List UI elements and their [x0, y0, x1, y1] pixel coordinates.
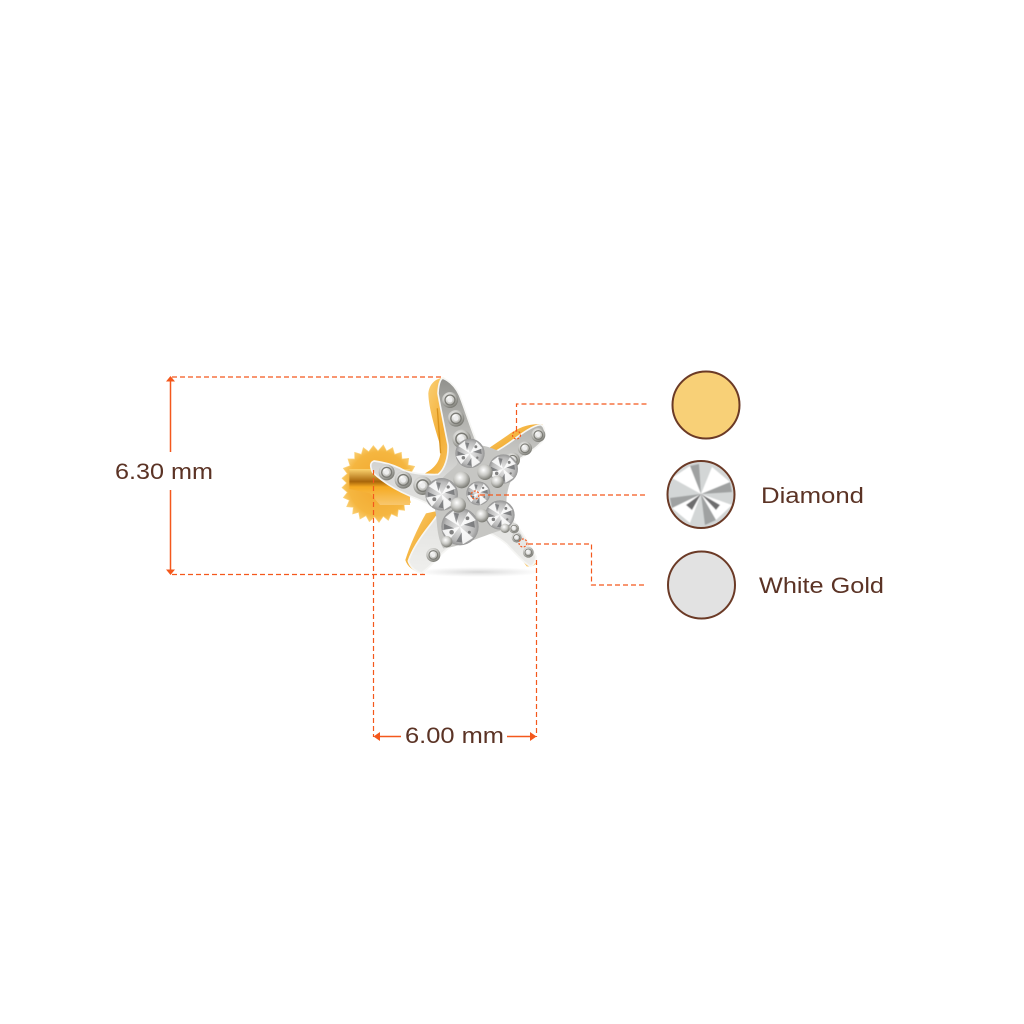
swatch: white gold	[668, 552, 735, 618]
swatch: diamond	[668, 461, 734, 528]
gold highlights	[412, 408, 441, 560]
callout: diamond leader	[471, 491, 646, 499]
gold back: lower left arm	[405, 510, 447, 574]
gold back: top arm	[425, 378, 463, 475]
polished beads	[441, 465, 510, 547]
dimension: width 6.00 mm	[374, 470, 536, 748]
centre diamonds	[425, 439, 518, 545]
callout: gold leader	[512, 404, 648, 439]
small pave stones	[379, 392, 545, 562]
label: Diamond: Diamond	[761, 483, 864, 508]
product shadow	[414, 567, 542, 577]
gold back: lower right arm	[484, 531, 536, 567]
dimension: width 6.00 mm: 6.00 mm	[405, 723, 504, 748]
gold back: upper right arm	[484, 424, 543, 462]
pave bed behind stones	[430, 444, 517, 548]
earring product image	[342, 378, 545, 574]
white gold star face	[371, 378, 545, 573]
dimension: height 6.30 mm: 6.30 mm	[115, 459, 213, 484]
swatch: yellow gold	[672, 372, 740, 438]
label: White Gold: White Gold	[759, 573, 884, 598]
dimension: height 6.30 mm	[115, 376, 443, 575]
callout: white gold leader	[519, 539, 644, 585]
screw post	[349, 469, 410, 505]
screw back gear	[342, 445, 417, 522]
